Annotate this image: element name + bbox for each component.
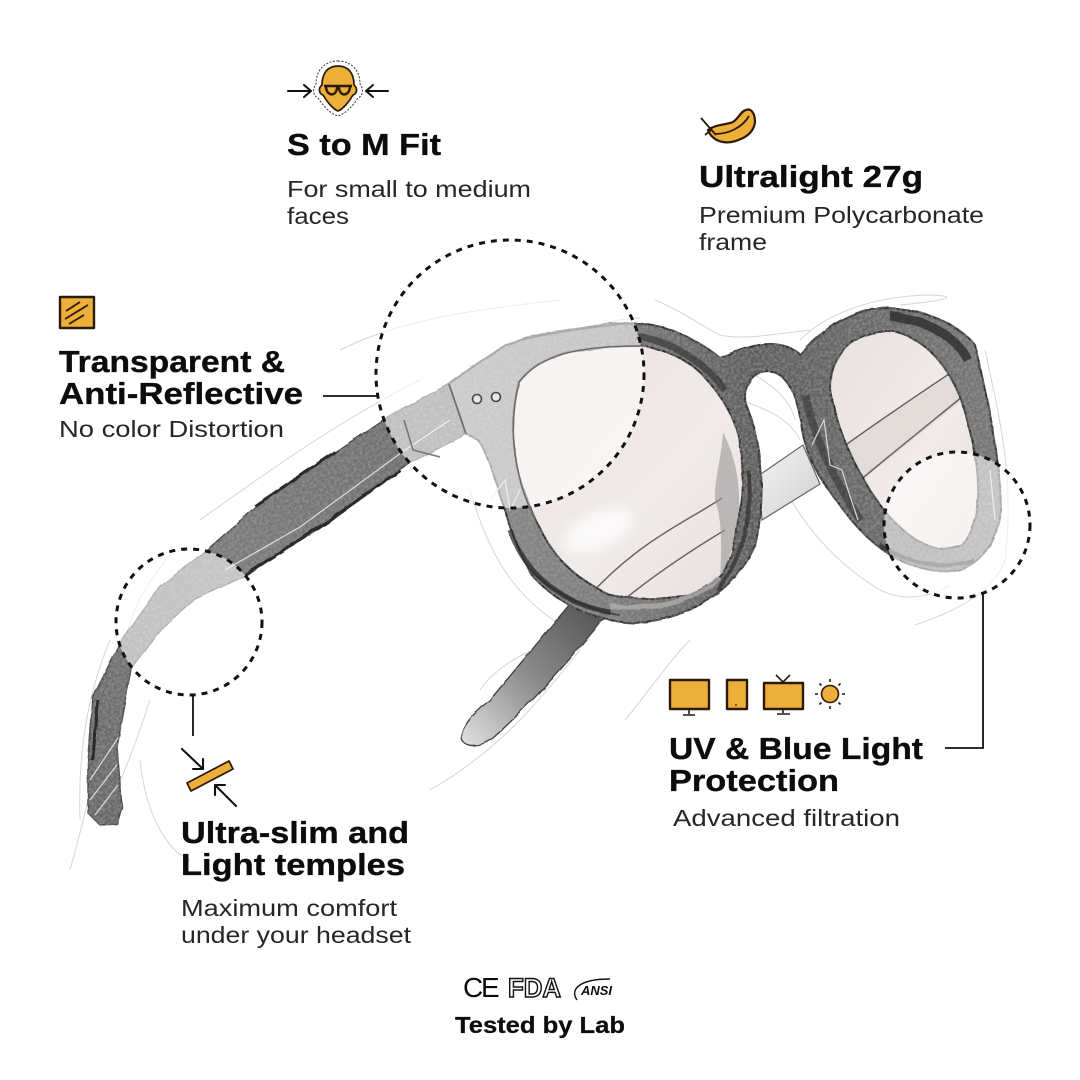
faint sketch lines	[70, 295, 1008, 870]
rivets	[472, 392, 500, 404]
description: Premium Polycarbonate	[699, 202, 984, 228]
temple highlight lines	[90, 420, 450, 815]
icon: sun	[815, 679, 845, 709]
icon: television	[764, 675, 803, 714]
logo: FDA: FDA	[508, 973, 561, 1003]
heading: Light temples	[181, 847, 405, 882]
description: frame	[699, 229, 767, 255]
icon: tablet	[727, 680, 747, 709]
illustration: sketched sunglasses	[70, 295, 1008, 870]
icon: lens stripes	[60, 297, 94, 328]
arm lines inside lenses	[590, 368, 968, 603]
temple	[88, 384, 466, 825]
heading: UV & Blue Light	[669, 731, 923, 766]
reflection on left lens	[556, 498, 640, 562]
heading: Protection	[669, 763, 839, 798]
description: Maximum comfort	[181, 895, 398, 921]
description: under your headset	[181, 922, 412, 948]
connector: UV protection	[945, 592, 983, 748]
feature: Ultralight 27g	[699, 110, 984, 255]
lens: right	[830, 332, 978, 549]
dark charcoal shading on frame	[510, 316, 975, 615]
callout circle: temple	[116, 549, 262, 695]
certifications	[455, 972, 625, 1038]
icon: feather	[701, 110, 755, 142]
shaded inner rim of left lens	[715, 432, 739, 580]
connector: anti-reflective	[323, 395, 377, 397]
far temple arm	[758, 445, 820, 520]
frame	[449, 308, 1001, 623]
description: No color Distortion	[59, 416, 284, 442]
connector: temples	[192, 696, 194, 736]
arm seen through right lens	[836, 372, 972, 482]
callout circle: lens and hinge	[376, 240, 644, 508]
icon: monitor	[670, 680, 709, 715]
heading: Anti-Reflective	[59, 376, 303, 411]
callout circle: lens corner	[884, 452, 1030, 598]
feature: Ultra-slim temples	[181, 749, 412, 948]
heading: Ultralight 27g	[699, 159, 923, 194]
near temple arm behind lens	[461, 598, 604, 746]
description: Advanced filtration	[673, 805, 900, 831]
temple dark edges	[92, 452, 400, 760]
light highlights on frame	[490, 420, 995, 520]
heading: S to M Fit	[287, 127, 441, 162]
description: faces	[287, 203, 349, 229]
description: For small to medium	[287, 176, 531, 202]
icon: head with glasses	[288, 61, 388, 116]
feature: Transparent and Anti-Reflective	[59, 297, 303, 442]
feature: S to M Fit	[287, 61, 531, 229]
caption: Tested by Lab	[455, 1012, 625, 1038]
lens: left	[513, 346, 743, 599]
heading: Ultra-slim and	[181, 815, 409, 850]
feature: UV and Blue Light Protection	[669, 675, 923, 831]
heading: Transparent &	[59, 344, 285, 379]
logo: ANSI: ANSI	[580, 984, 613, 998]
frame detail lines inside the big circle	[404, 323, 641, 518]
icon: slim temple bar with arrows	[182, 749, 236, 806]
logo: CE: CE	[463, 972, 500, 1003]
logo: ANSI	[575, 979, 613, 1000]
